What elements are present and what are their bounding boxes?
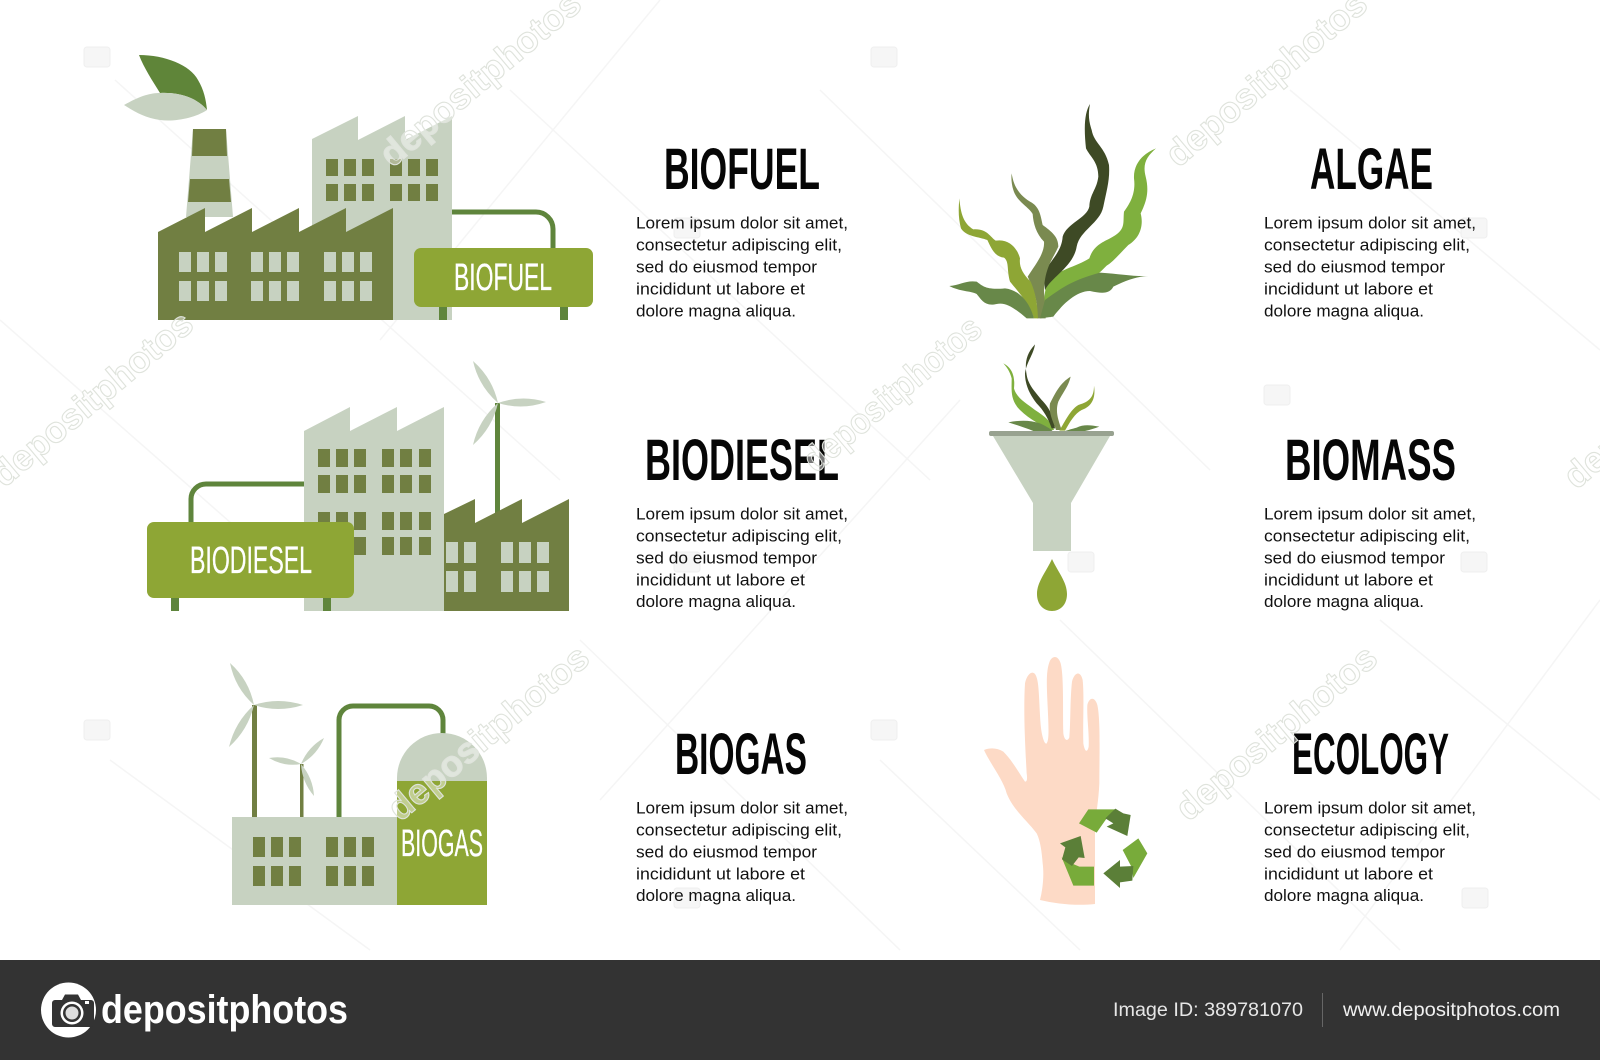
text block: algae: consectetur adipiscing elit,	[1264, 237, 1470, 255]
logo: wordmark: depositphotos	[101, 988, 348, 1032]
logo: camera	[41, 982, 96, 1038]
yellow-green frond	[959, 198, 1038, 318]
heading: biogas: BIOGAS	[675, 722, 807, 787]
dark factory building	[158, 208, 393, 320]
icon: oil drop	[1037, 559, 1067, 611]
hand	[984, 657, 1100, 905]
text block: algae: dolore magna aliqua.	[1264, 302, 1424, 320]
pipe	[339, 706, 443, 817]
tank: biogas	[397, 733, 487, 905]
light green frond	[1043, 148, 1156, 317]
sign: biofuel	[414, 248, 593, 320]
icon: leaves	[124, 55, 207, 121]
heading: biodiesel: BIODIESEL	[645, 428, 839, 493]
recycling arrows	[1060, 809, 1147, 888]
illustration: hand with recycling symbol	[984, 657, 1147, 905]
tank: biogas: BIOGAS	[401, 823, 483, 865]
text block: biomass: incididunt ut labore et	[1264, 571, 1433, 589]
text block: biogas: sed do eiusmod tempor	[636, 843, 818, 861]
text block: biomass: dolore magna aliqua.	[1264, 593, 1424, 611]
text block: biodiesel: Lorem ipsum dolor sit amet,	[636, 506, 848, 524]
text block: biofuel: consectetur adipiscing elit,	[636, 237, 842, 255]
illustration: biodiesel factory	[147, 361, 569, 611]
text block: biofuel: incididunt ut labore et	[636, 281, 805, 299]
image id: Image ID: 389781070	[1113, 999, 1303, 1021]
text block: biogas: incididunt ut labore et	[636, 865, 805, 883]
wind turbines	[229, 663, 324, 817]
text block: biodiesel	[636, 506, 848, 611]
sign: biofuel: BIOFUEL	[454, 257, 552, 299]
dark frond	[1043, 104, 1109, 290]
building	[232, 817, 397, 905]
sign: biodiesel: BIODIESEL	[190, 540, 312, 582]
illustration: biofuel factory	[124, 55, 593, 320]
text block: algae: Lorem ipsum dolor sit amet,	[1264, 215, 1476, 233]
heading: ecology: ECOLOGY	[1292, 722, 1449, 787]
text block: biodiesel: consectetur adipiscing elit,	[636, 527, 842, 545]
text block: ecology: sed do eiusmod tempor	[1264, 843, 1446, 861]
watermarks: depositphotos	[795, 307, 989, 480]
funnel body	[993, 436, 1110, 551]
text block: biodiesel: dolore magna aliqua.	[636, 593, 796, 611]
footer bar	[0, 960, 1600, 1060]
illustration: algae	[949, 104, 1156, 318]
text block: biogas: dolore magna aliqua.	[636, 887, 796, 905]
text block: biomass	[1264, 506, 1476, 611]
text block: biogas	[636, 799, 848, 905]
heading: biofuel: BIOFUEL	[664, 137, 820, 202]
dark building	[444, 499, 569, 611]
mid green fronds	[949, 273, 1148, 318]
text block: biogas: Lorem ipsum dolor sit amet,	[636, 799, 848, 817]
chimney	[186, 129, 233, 217]
light building	[304, 407, 444, 611]
pipe	[191, 484, 304, 524]
heading: algae: ALGAE	[1310, 137, 1433, 202]
funnel rim	[989, 431, 1114, 436]
text block: ecology: dolore magna aliqua.	[1264, 887, 1424, 905]
text block: biodiesel: incididunt ut labore et	[636, 571, 805, 589]
olive frond	[1011, 173, 1058, 318]
text block: ecology: Lorem ipsum dolor sit amet,	[1264, 799, 1476, 817]
website: www.depositphotos.com	[1342, 999, 1560, 1021]
illustration: biogas plant	[229, 663, 487, 905]
text block: biogas: consectetur adipiscing elit,	[636, 821, 842, 839]
text block: biomass: Lorem ipsum dolor sit amet,	[1264, 506, 1476, 524]
text block: algae: sed do eiusmod tempor	[1264, 259, 1446, 277]
text block: ecology: consectetur adipiscing elit,	[1264, 821, 1470, 839]
text block: biomass: sed do eiusmod tempor	[1264, 549, 1446, 567]
text block: biofuel: Lorem ipsum dolor sit amet,	[636, 215, 848, 233]
watermarks	[0, 0, 1600, 828]
illustration: funnel	[989, 344, 1114, 611]
watermarks: depositphotos	[379, 636, 597, 828]
sign: biodiesel	[147, 522, 354, 611]
wind turbine	[473, 361, 546, 515]
text block: algae: incididunt ut labore et	[1264, 281, 1433, 299]
small algae	[1003, 344, 1099, 431]
text block: ecology	[1264, 799, 1476, 905]
heading: biomass: BIOMASS	[1285, 428, 1456, 493]
watermarks: depositphotos	[1167, 636, 1385, 828]
light factory building	[312, 116, 452, 320]
text block: biofuel: sed do eiusmod tempor	[636, 259, 818, 277]
text block: biofuel	[636, 215, 848, 320]
text block: algae	[1264, 215, 1476, 320]
text block: biodiesel: sed do eiusmod tempor	[636, 549, 818, 567]
text block: biofuel: dolore magna aliqua.	[636, 302, 796, 320]
text block: biomass: consectetur adipiscing elit,	[1264, 527, 1470, 545]
text block: ecology: incididunt ut labore et	[1264, 865, 1433, 883]
pipe	[452, 212, 553, 250]
